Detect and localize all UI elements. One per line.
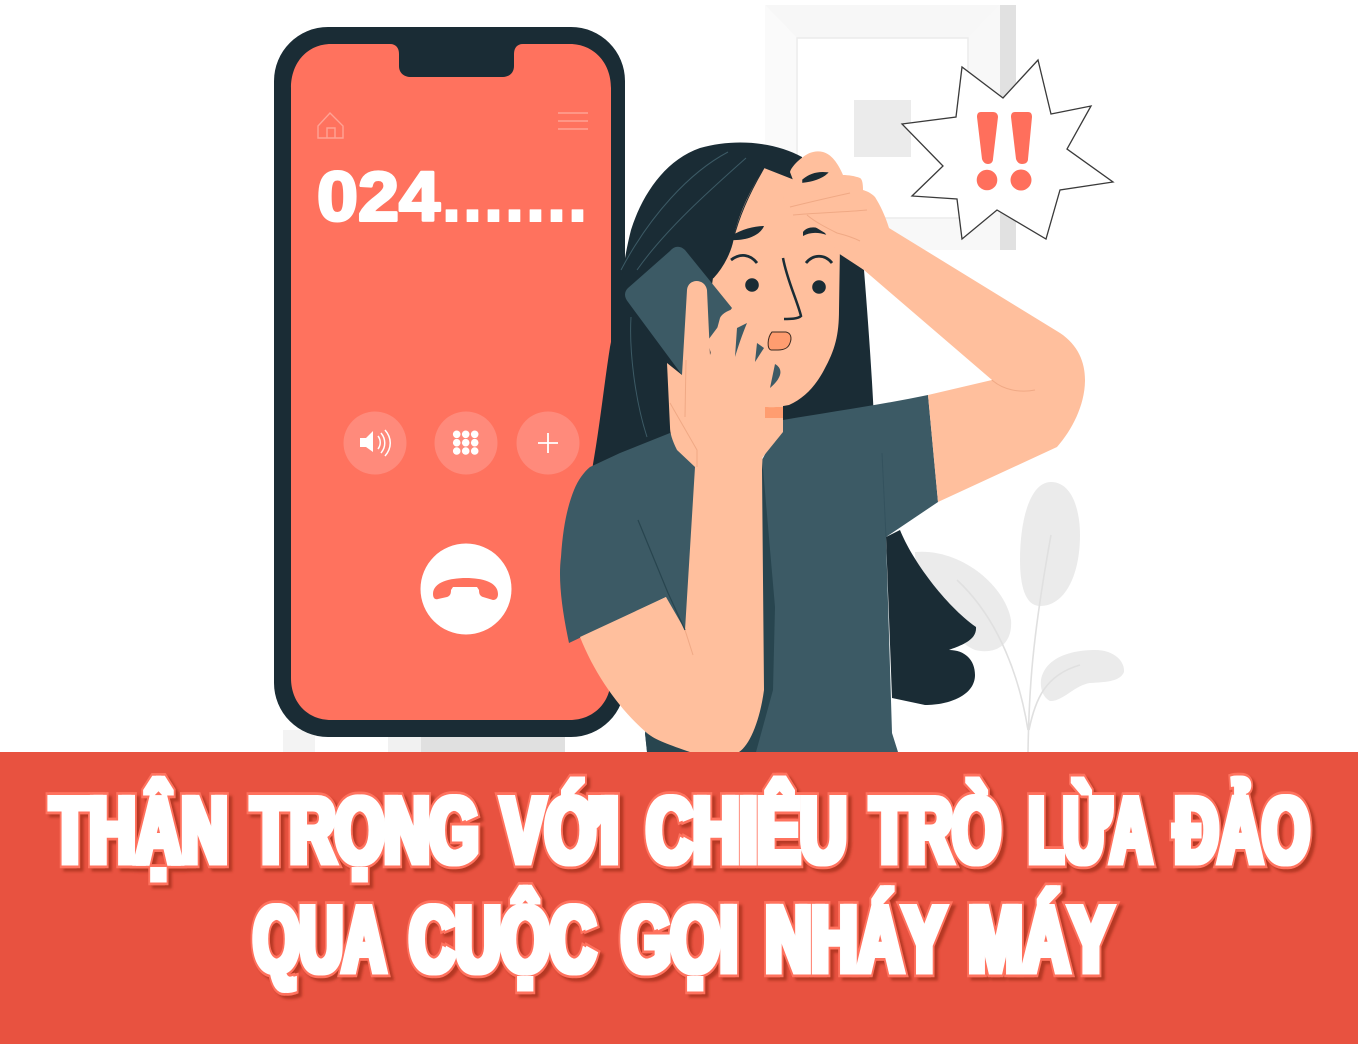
right arm and hand [783, 151, 1085, 502]
phone device [274, 27, 625, 737]
open mouth shade [770, 364, 780, 388]
phone number [317, 150, 588, 238]
face [705, 168, 840, 407]
title [49, 778, 1315, 995]
mouth [768, 332, 791, 350]
sleeve crease right [882, 453, 886, 537]
hair back lower [886, 530, 976, 705]
background picture frame [765, 5, 1016, 250]
phone number: 024 [317, 158, 440, 236]
icon: plant [915, 482, 1124, 752]
eyelid left [731, 255, 757, 263]
shirt shadow under arm [725, 457, 775, 752]
button: end call [420, 544, 512, 634]
neck [671, 400, 783, 470]
finger gap two [755, 343, 764, 362]
eye left [745, 278, 759, 292]
fingers lines [790, 193, 867, 241]
title shadow [52, 781, 1315, 995]
title outline [49, 778, 1311, 992]
held phone [625, 247, 732, 375]
eyelid right [806, 256, 832, 263]
neck shadow [765, 407, 783, 418]
eyebrow left [731, 226, 764, 240]
shirt shadow lower left [645, 733, 690, 752]
banner [0, 752, 1358, 1044]
button: add [516, 412, 580, 474]
icon: home [318, 113, 343, 138]
phone number: ....... [441, 150, 588, 238]
shirt [560, 395, 938, 752]
finger gap one [735, 323, 747, 357]
sleeve crease [638, 520, 685, 630]
nose [783, 258, 801, 319]
exclamation marks [977, 112, 1032, 190]
icon: menu [558, 113, 588, 129]
phone screen [291, 44, 611, 720]
hair back [592, 142, 874, 470]
button: speaker [344, 412, 406, 474]
title fill [49, 778, 1311, 992]
hand lines [670, 360, 697, 655]
hair strand on fingers [803, 173, 827, 182]
left arm and hand [580, 281, 776, 752]
eyebrow right [803, 227, 827, 236]
eye right [812, 280, 826, 294]
hair strands [621, 152, 746, 437]
woman [560, 151, 1085, 752]
face hairline [713, 168, 764, 278]
button: keypad [434, 412, 498, 474]
elbow crease [992, 380, 1035, 391]
phone stand base [283, 730, 565, 752]
speech burst [902, 60, 1113, 239]
